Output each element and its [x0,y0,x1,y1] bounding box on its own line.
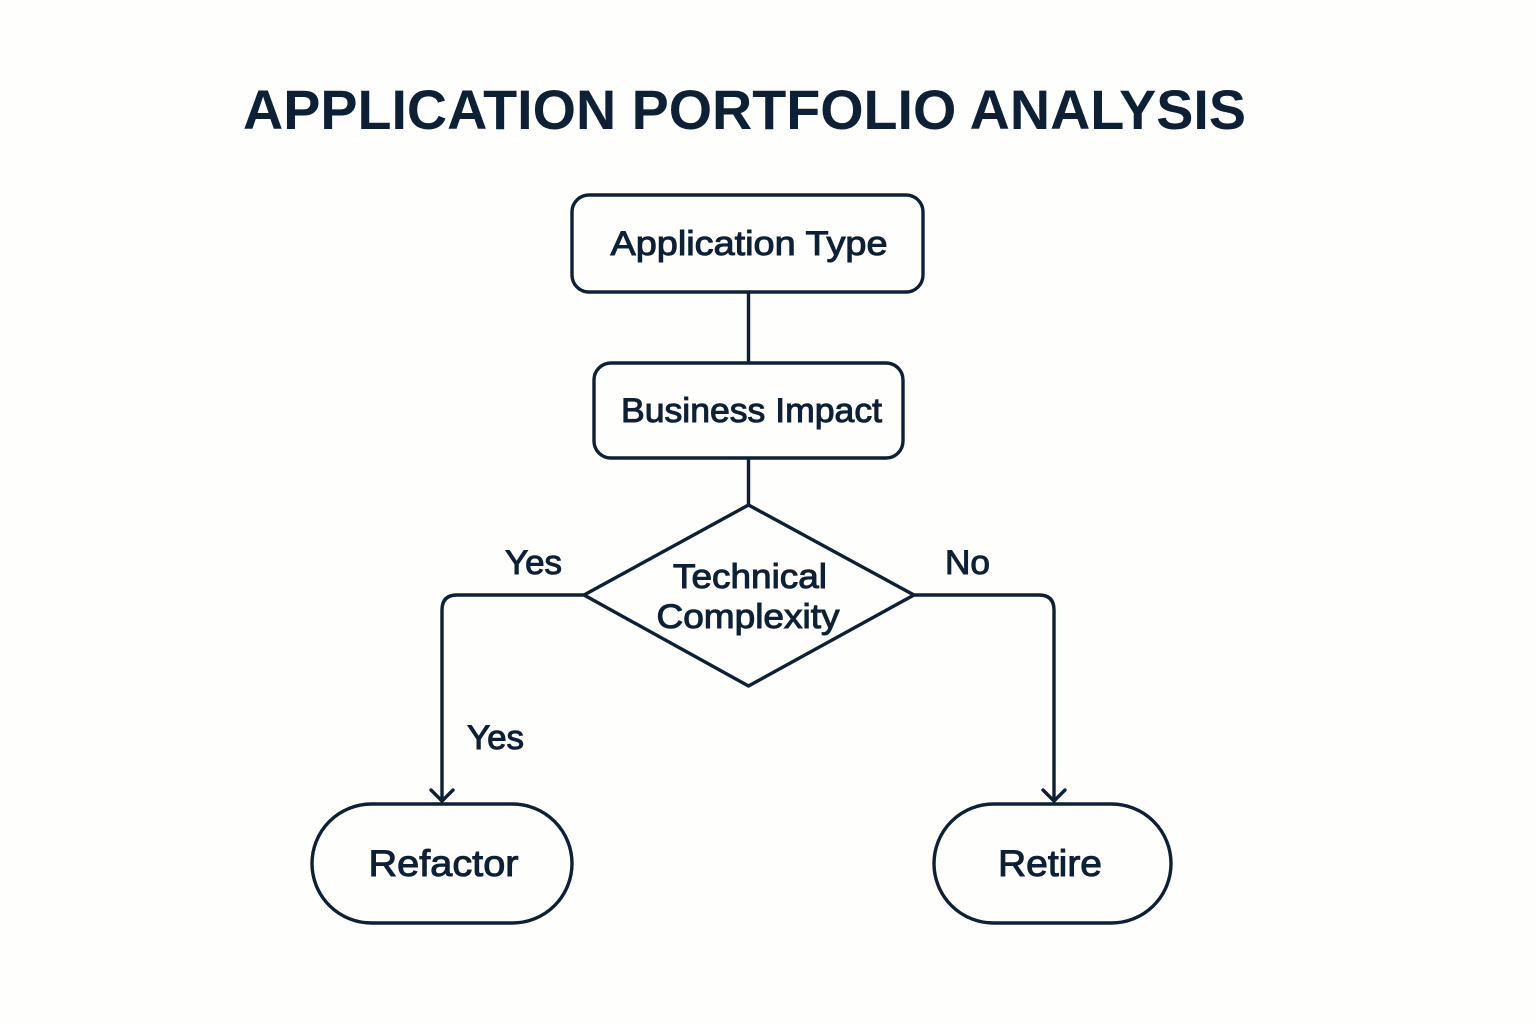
outcome: refactor [312,804,572,923]
outcome: retire [934,804,1171,923]
decision: technical complexity: Complexity [656,598,840,636]
decision: technical complexity [584,505,914,686]
arrow: yes to refactor [431,595,584,801]
outcome: retire: Retire [998,843,1102,884]
node: business impact: Business Impact [621,392,883,430]
decision: technical complexity: Technical [673,558,827,596]
node: application type [572,195,923,292]
label: yes lower: Yes [467,719,524,757]
connector: application type to business impact [747,292,750,363]
connector: business impact to technical complexity [747,458,750,505]
title: APPLICATION PORTFOLIO ANALYSIS [243,78,1246,141]
arrow: no to retire [914,595,1065,801]
node: application type: Application Type [610,225,888,263]
label: no: No [945,544,990,582]
outcome: refactor: Refactor [368,843,518,884]
node: business impact [594,363,903,458]
label: yes upper: Yes [505,544,562,582]
